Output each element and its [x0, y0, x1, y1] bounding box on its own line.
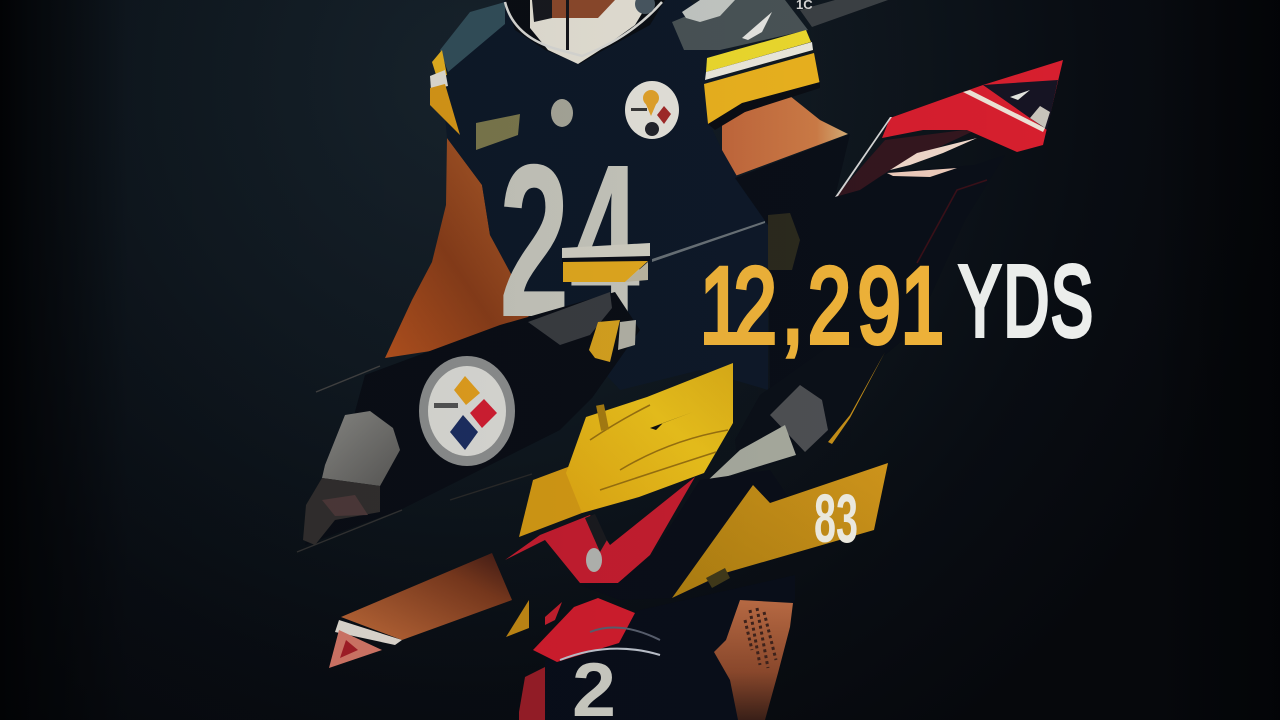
gold stat bar — [672, 463, 888, 598]
player upper body — [385, 0, 848, 390]
right shoulder — [672, 0, 808, 50]
right sleeve — [704, 30, 820, 130]
stat: 12,291: 12,291 — [700, 245, 944, 365]
glove — [303, 478, 380, 545]
chest logo — [625, 81, 679, 139]
lower gold sliver — [506, 600, 529, 637]
number 83: 83 — [814, 480, 858, 557]
knee — [714, 600, 793, 720]
jersey number: 24 — [499, 120, 640, 363]
diagonal line — [652, 221, 765, 262]
left gold panel — [519, 455, 600, 537]
yellow pants — [519, 363, 733, 537]
lower jersey — [519, 575, 795, 720]
yellow wrist accent — [589, 320, 620, 362]
stat: YDS: YDS — [959, 245, 1093, 357]
left shoulder — [440, 2, 505, 72]
right lower forearm — [705, 345, 885, 483]
lower red shape — [533, 598, 635, 662]
number band — [562, 243, 650, 282]
collar badge — [551, 99, 573, 127]
top right strip — [796, 0, 888, 27]
grey sleeve texture — [528, 292, 612, 345]
nike swoosh — [742, 12, 772, 40]
dark cut: right upper arm — [735, 134, 1005, 390]
pants wrinkles — [590, 405, 728, 490]
shoulder logo mark — [682, 0, 735, 22]
forearm skin slice — [329, 553, 512, 668]
jersey stripes — [560, 649, 660, 660]
chest patch — [476, 114, 520, 150]
thin cut lines — [297, 366, 532, 552]
shadow shape — [768, 213, 800, 270]
jersey — [440, 0, 768, 390]
dark forearm band with logo — [303, 292, 640, 545]
red jersey slice — [505, 470, 790, 600]
main pants — [566, 363, 733, 513]
right arm — [722, 96, 848, 176]
helmet and chin — [505, 0, 665, 64]
grey wrist wrap — [322, 411, 400, 486]
swoosh — [650, 412, 693, 430]
knee tattoo — [745, 608, 776, 668]
steelers logo — [419, 356, 515, 466]
left arm — [385, 138, 530, 358]
red wing graphic — [835, 60, 1063, 263]
left sleeve — [430, 50, 460, 135]
